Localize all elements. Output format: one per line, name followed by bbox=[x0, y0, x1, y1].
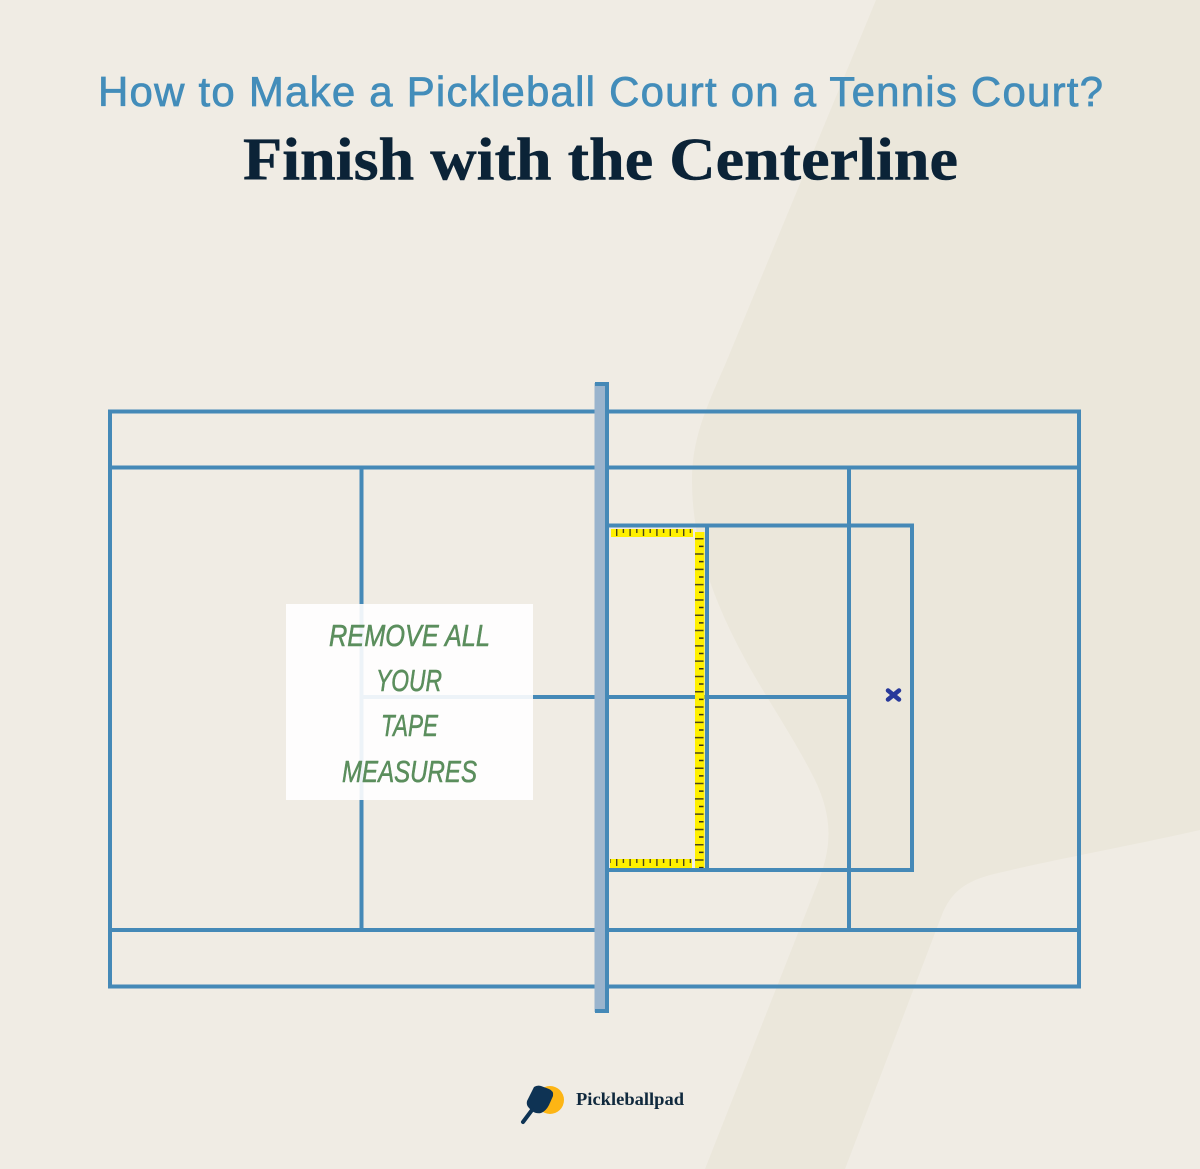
right service line bbox=[847, 467, 851, 930]
icon: center mark x bbox=[888, 690, 899, 700]
vertical tape bbox=[695, 532, 704, 868]
heading: step title: Finish with the Centerline bbox=[243, 126, 958, 192]
logo: Pickleballpad bbox=[523, 1086, 684, 1122]
upper sideline bbox=[110, 466, 1079, 470]
callout: remove all your tape measures bbox=[286, 604, 533, 800]
center service line bbox=[361, 695, 849, 699]
net band bbox=[594, 383, 608, 1012]
left service line bbox=[360, 467, 364, 930]
logo wordmark: Pickleballpad bbox=[576, 1089, 684, 1109]
callout background bbox=[286, 604, 533, 800]
callout text: REMOVE ALL bbox=[329, 618, 490, 653]
court outer boundary bbox=[110, 412, 1079, 986]
pickleball kitchen and baseline box bbox=[607, 526, 912, 870]
background blob shape bbox=[692, 0, 1200, 1169]
icon: yellow ball bbox=[536, 1086, 564, 1114]
net bbox=[594, 383, 608, 1012]
callout text bbox=[329, 618, 490, 789]
callout text: TAPE bbox=[381, 708, 438, 743]
bottom tape bbox=[610, 859, 692, 868]
tape measures bbox=[610, 529, 704, 868]
kitchen line bbox=[705, 525, 709, 870]
net edge bbox=[595, 384, 607, 1011]
heading: question: How to Make a Pickleball Court on a Tennis Court? bbox=[98, 68, 1103, 115]
tennis court diagram bbox=[110, 412, 1079, 986]
top tape bbox=[611, 529, 693, 537]
icon: paddle bbox=[523, 1086, 553, 1122]
callout text: YOUR bbox=[376, 663, 442, 698]
lower sideline bbox=[110, 928, 1079, 932]
callout text: MEASURES bbox=[342, 754, 477, 789]
